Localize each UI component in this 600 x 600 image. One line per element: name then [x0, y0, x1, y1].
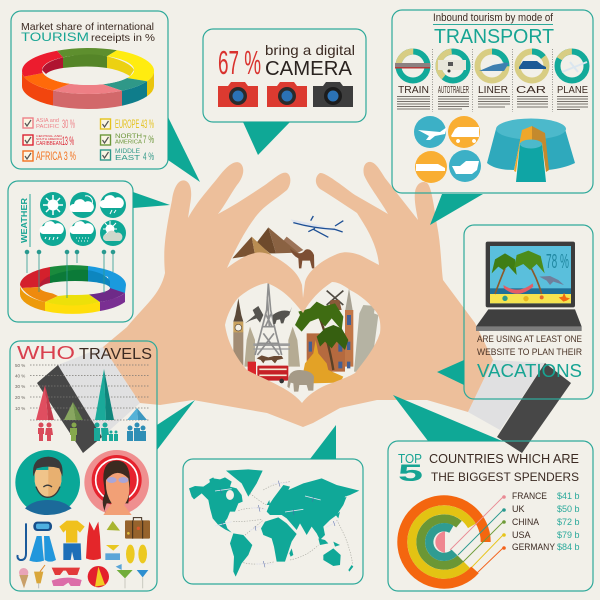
country list [512, 491, 555, 552]
heading [17, 343, 152, 363]
people icons [38, 422, 146, 441]
heading: Market share of international [21, 21, 154, 33]
icon: sunglasses [52, 568, 82, 586]
weather icons [39, 192, 126, 246]
heading: receipts in % [91, 32, 155, 44]
legend: ASIA and [36, 118, 59, 124]
panel frame [10, 341, 157, 591]
country list: FRANCE [512, 491, 547, 501]
ring chart [22, 48, 154, 109]
icon: flip flops [126, 545, 147, 563]
caption: WEBSITE TO PLAN THEIR [477, 347, 582, 358]
transport labels: AUTOTRAILER [438, 85, 469, 96]
leader dots [502, 495, 506, 550]
heading: WHO [17, 343, 75, 363]
speech tail [168, 117, 200, 182]
heading: COUNTRIES WHICH ARE [429, 451, 579, 466]
icon: cocktail [116, 564, 133, 588]
panel frame [183, 459, 363, 584]
heading: TRAVELS [79, 346, 152, 363]
beach items [17, 518, 150, 588]
pyramid chart: 10 % [15, 406, 25, 411]
legend: MIDDLE [115, 149, 140, 155]
radial bar chart [402, 500, 486, 584]
panel: world map [183, 425, 363, 584]
spend values: $41 b [557, 491, 580, 501]
pyramid chart: 30 % [15, 384, 25, 389]
pyramid chart: 50 % [15, 363, 25, 368]
panel: transport [392, 10, 593, 225]
icon: shirt and shorts [59, 521, 85, 560]
icon: swim trunks [105, 553, 120, 560]
icon: bikini [106, 521, 120, 551]
icon: ice cream [19, 568, 28, 588]
icon: airplane [291, 216, 343, 237]
legend: NORTH [115, 133, 142, 140]
legend: CENTRAL AND [36, 134, 63, 138]
icon: church and windmill [307, 288, 353, 372]
transport labels [398, 85, 588, 96]
panel frame [11, 11, 168, 169]
column copy and separators [397, 49, 588, 112]
icon: Tower of Pisa [354, 305, 378, 373]
legend: 13 % [62, 134, 74, 148]
panel: vacations [437, 225, 593, 399]
heading: TRANSPORT [434, 25, 554, 48]
icon: matador and bull [245, 306, 292, 324]
icon: Eiffel Tower [255, 283, 282, 355]
heading: TOP [398, 452, 422, 466]
legend: CARIBBEAN [36, 141, 62, 147]
pyramid chart: 20 % [15, 395, 25, 400]
icon: Tower Bridge [244, 327, 300, 367]
speech tail [243, 122, 290, 155]
statistic: 67 % [218, 44, 261, 81]
panel frame [203, 29, 366, 122]
legend: 7 % [143, 134, 154, 146]
heading: Inbound tourism by mode of [433, 12, 554, 24]
panel frame [8, 181, 133, 322]
legend: 4 % [143, 151, 154, 163]
icon: red swimsuit [86, 522, 101, 560]
panel: digital camera [203, 29, 366, 155]
transport labels: PLANE [557, 85, 588, 96]
heading: VACATIONS [477, 361, 582, 381]
icon: laptop [476, 242, 582, 331]
caption: ARE USING AT LEAST ONE [477, 334, 582, 345]
panel frame [464, 225, 593, 399]
leader lines [450, 497, 503, 573]
country list: GERMANY [512, 542, 555, 552]
icon: phone box and London bus [248, 362, 288, 383]
heading [21, 21, 155, 44]
spend values: $50 b [557, 504, 580, 514]
icon: swim fins [29, 536, 56, 562]
legend: EAST [115, 153, 141, 162]
legend: AFRICA 3 % [36, 149, 76, 163]
panel: top 5 spenders [388, 395, 593, 591]
icon: red camera [218, 82, 258, 107]
speech tail [430, 194, 483, 225]
icon: blue cocktail [137, 570, 148, 588]
panel: market share of tourism receipts [11, 11, 200, 182]
legend: AMERICA [115, 140, 143, 146]
icon: camel [290, 248, 314, 268]
icon: elephant [287, 370, 314, 392]
spend values: $79 b [557, 530, 580, 540]
country list: UK [512, 504, 525, 514]
icon: snorkel and mask [17, 522, 52, 560]
icon: deer [257, 355, 283, 363]
heading [265, 42, 355, 80]
statistic: 78 % [546, 251, 569, 273]
icon: suitcase [125, 518, 150, 539]
icon: Big Ben [233, 298, 243, 368]
panel frame [392, 10, 593, 193]
pyramid chart: 40 % [15, 374, 25, 378]
transport labels: CAR [516, 85, 546, 96]
heading: THE BIGGEST SPENDERS [431, 470, 579, 484]
heading [398, 451, 579, 487]
caption [477, 334, 582, 358]
spend values: $72 b [557, 517, 580, 527]
speech tail [157, 400, 195, 450]
heading: 5 [398, 460, 423, 487]
illustration: two hands forming a heart [103, 162, 493, 427]
male traveller portrait [15, 450, 80, 515]
speech tail [133, 192, 170, 208]
icon: palm trees [295, 302, 348, 370]
pyramid chart [15, 363, 150, 420]
spend values [557, 491, 580, 552]
icon: beach ball [88, 566, 109, 587]
icon: sundae [34, 565, 45, 588]
country list: USA [512, 530, 531, 540]
icon: pyramids [232, 227, 303, 261]
stepped cylinder chart [487, 118, 575, 182]
heading: bring a digital [265, 42, 355, 58]
speech tail [393, 395, 502, 441]
icon: golden pagoda [303, 340, 343, 383]
icon: dark camera [313, 82, 353, 107]
heading: TOURISM [21, 32, 89, 44]
heading: CAMERA [265, 58, 353, 80]
arm sleeves [37, 347, 571, 453]
legend: 30 % [62, 117, 75, 131]
panel: who travels [10, 341, 195, 591]
world map [189, 469, 359, 577]
transport labels: LINER [478, 85, 508, 96]
country list: CHINA [512, 517, 539, 527]
legend: PACIFIC [36, 124, 59, 130]
transport donut charts [398, 46, 592, 86]
ring chart [20, 265, 126, 314]
legend [23, 117, 154, 163]
icon: red camera [267, 82, 307, 107]
connector dots [25, 250, 115, 298]
speech tail [310, 425, 336, 459]
panel: weather [8, 181, 170, 322]
legend: SOUTH AMERICA [36, 137, 62, 141]
illustration: landmarks inside the heart [232, 216, 378, 392]
transport vehicle icons [395, 60, 587, 72]
heading [433, 12, 554, 48]
vertical heading: WEATHER [19, 198, 29, 243]
female traveller portrait [84, 450, 149, 515]
speech tail [437, 360, 464, 385]
panel frame [388, 441, 593, 591]
round transport icons [414, 116, 481, 183]
panel: market share of tourism receipts: EUROPE 43 % [115, 117, 154, 131]
transport labels: TRAIN [398, 85, 429, 96]
spend values: $84 b [557, 542, 580, 552]
